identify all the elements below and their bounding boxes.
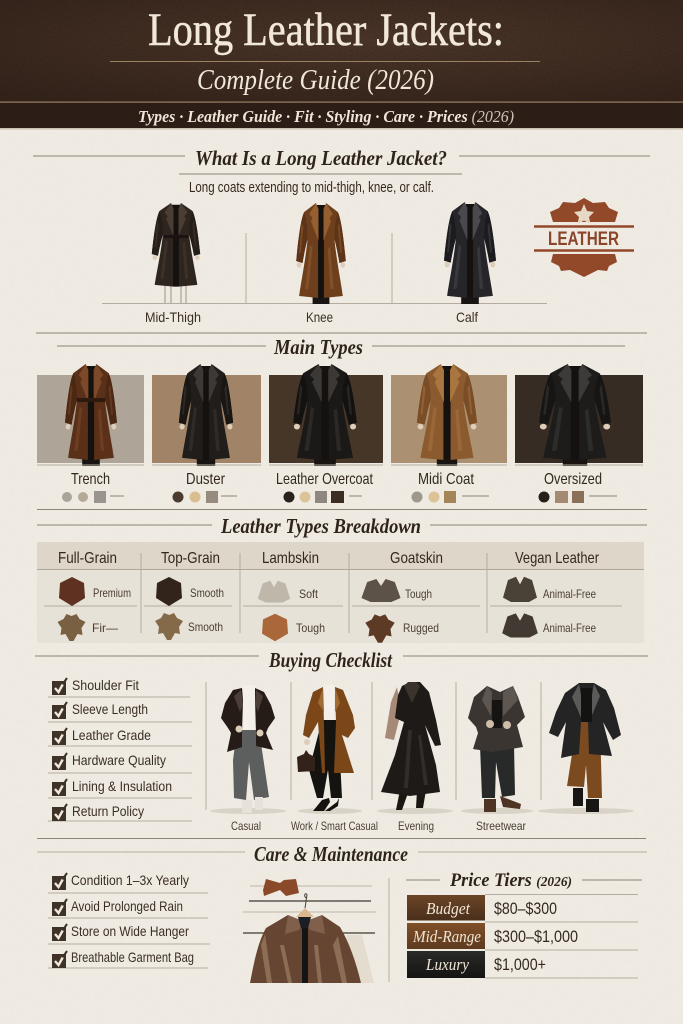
care checklist (48, 872, 210, 968)
column: goatskin: Goatskin (390, 550, 443, 567)
price tiers (406, 870, 642, 978)
checklist: Sleeve Length (72, 701, 148, 717)
label: mid-thigh: Mid-Thigh (145, 309, 201, 325)
column: vegan leather: Animal-Free (543, 587, 596, 601)
tier: budget (407, 895, 557, 920)
heading: Leather Types Breakdown (220, 514, 421, 538)
column: full-grain: Premium (93, 586, 131, 600)
heading: What Is a Long Leather Jacket? (195, 146, 447, 170)
care checklist: Condition 1–3x Yearly (71, 872, 189, 888)
heading: Care & Maintenance (254, 842, 408, 866)
icon: leather badge: LEATHER (548, 229, 619, 250)
label: calf: Calf (456, 309, 478, 325)
heading: Price Tiers (2026) (449, 870, 572, 891)
header banner (0, 0, 683, 130)
tier: mid-range: $300–$1,000 (494, 927, 578, 946)
section: what is a long leather jacket (33, 146, 650, 325)
icon: gloves (263, 879, 299, 896)
tier: budget: $80–$300 (494, 899, 557, 918)
checklist: Return Policy (72, 803, 144, 819)
checklist: Hardware Quality (72, 752, 166, 768)
outfit: streetwear (461, 686, 533, 814)
coat: knee (296, 203, 346, 304)
label: leather overcoat: Leather Overcoat (276, 471, 373, 488)
checklist: Lining & Insulation (72, 778, 172, 794)
column: top-grain: Smooth (190, 586, 224, 600)
label: casual: Casual (231, 819, 261, 833)
care checklist: Store on Wide Hanger (71, 923, 189, 939)
section: buying checklist (35, 648, 648, 833)
heading: Main Types (273, 335, 363, 359)
tier: budget: Budget (426, 899, 471, 918)
column: vegan leather (502, 550, 600, 638)
swatches: trench (62, 491, 124, 503)
column: goatskin: Tough (405, 587, 432, 601)
label: trench: Trench (71, 471, 110, 488)
outfit: evening (377, 682, 453, 814)
swatches: duster (172, 491, 237, 503)
label: streetwear: Streetwear (476, 819, 526, 833)
column: lambskin: Soft (299, 587, 319, 601)
column: vegan leather: Animal-Free (543, 621, 596, 635)
label: oversized: Oversized (544, 471, 602, 488)
card: trench (37, 364, 144, 466)
subtitle: Complete Guide (2026) (197, 64, 434, 96)
label: midi coat: Midi Coat (418, 471, 474, 488)
tier: mid-range: Mid-Range (412, 927, 481, 946)
table (37, 542, 644, 643)
icon: leather badge (534, 198, 634, 277)
checklist: Leather Grade (72, 727, 151, 743)
checklist: Shoulder Fit (72, 677, 139, 693)
heading: Buying Checklist (268, 648, 393, 672)
title: Long Leather Jackets: (148, 4, 504, 56)
column: top-grain: Smooth (188, 620, 223, 634)
outfit: oversized (538, 683, 634, 814)
tier: luxury (407, 951, 546, 978)
column: vegan leather: Vegan Leather (515, 550, 600, 567)
label: knee: Knee (306, 309, 333, 325)
column: full-grain (58, 550, 131, 641)
card: oversized (515, 364, 643, 466)
column: lambskin: Lambskin (262, 550, 319, 567)
label: evening: Evening (398, 819, 434, 833)
label: work / smart casual: Work / Smart Casual (291, 819, 378, 833)
topic strip: Types · Leather Guide · Fit · Styling · Care · Prices (2026) (138, 107, 514, 126)
coat: calf (444, 202, 496, 304)
care checklist: Avoid Prolonged Rain (71, 898, 183, 914)
swatches: leather overcoat (284, 491, 362, 503)
column: top-grain (155, 550, 224, 640)
care checklist: Breathable Garment Bag (71, 949, 194, 965)
section: care and maintenance (37, 842, 647, 983)
swatches: oversized (538, 491, 617, 503)
column: full-grain: Fir— (92, 621, 118, 635)
outfit: casual (210, 685, 286, 814)
column: top-grain: Top-Grain (161, 550, 220, 567)
card: leather overcoat (269, 364, 383, 466)
column: full-grain: Full-Grain (58, 550, 117, 567)
tier: mid-range (407, 923, 578, 949)
column: lambskin: Tough (296, 621, 325, 635)
swatches: midi coat (412, 491, 489, 503)
card: midi coat (391, 364, 507, 466)
column: goatskin: Rugged (403, 621, 439, 635)
card: duster (152, 364, 261, 466)
section: leather types breakdown (37, 514, 647, 643)
definition text: Long coats extending to mid-thigh, knee, or calf. (189, 180, 434, 196)
column: goatskin (361, 550, 443, 643)
tier: luxury: $1,000+ (494, 955, 546, 974)
label: duster: Duster (186, 471, 226, 488)
column: lambskin (258, 550, 325, 641)
illustration: jacket on hanger (243, 879, 376, 983)
checklist (48, 677, 192, 821)
outfit: work / smart casual (297, 685, 362, 814)
coat: mid-thigh (152, 203, 200, 303)
section: main types (37, 335, 643, 503)
tier: luxury: Luxury (425, 955, 469, 974)
